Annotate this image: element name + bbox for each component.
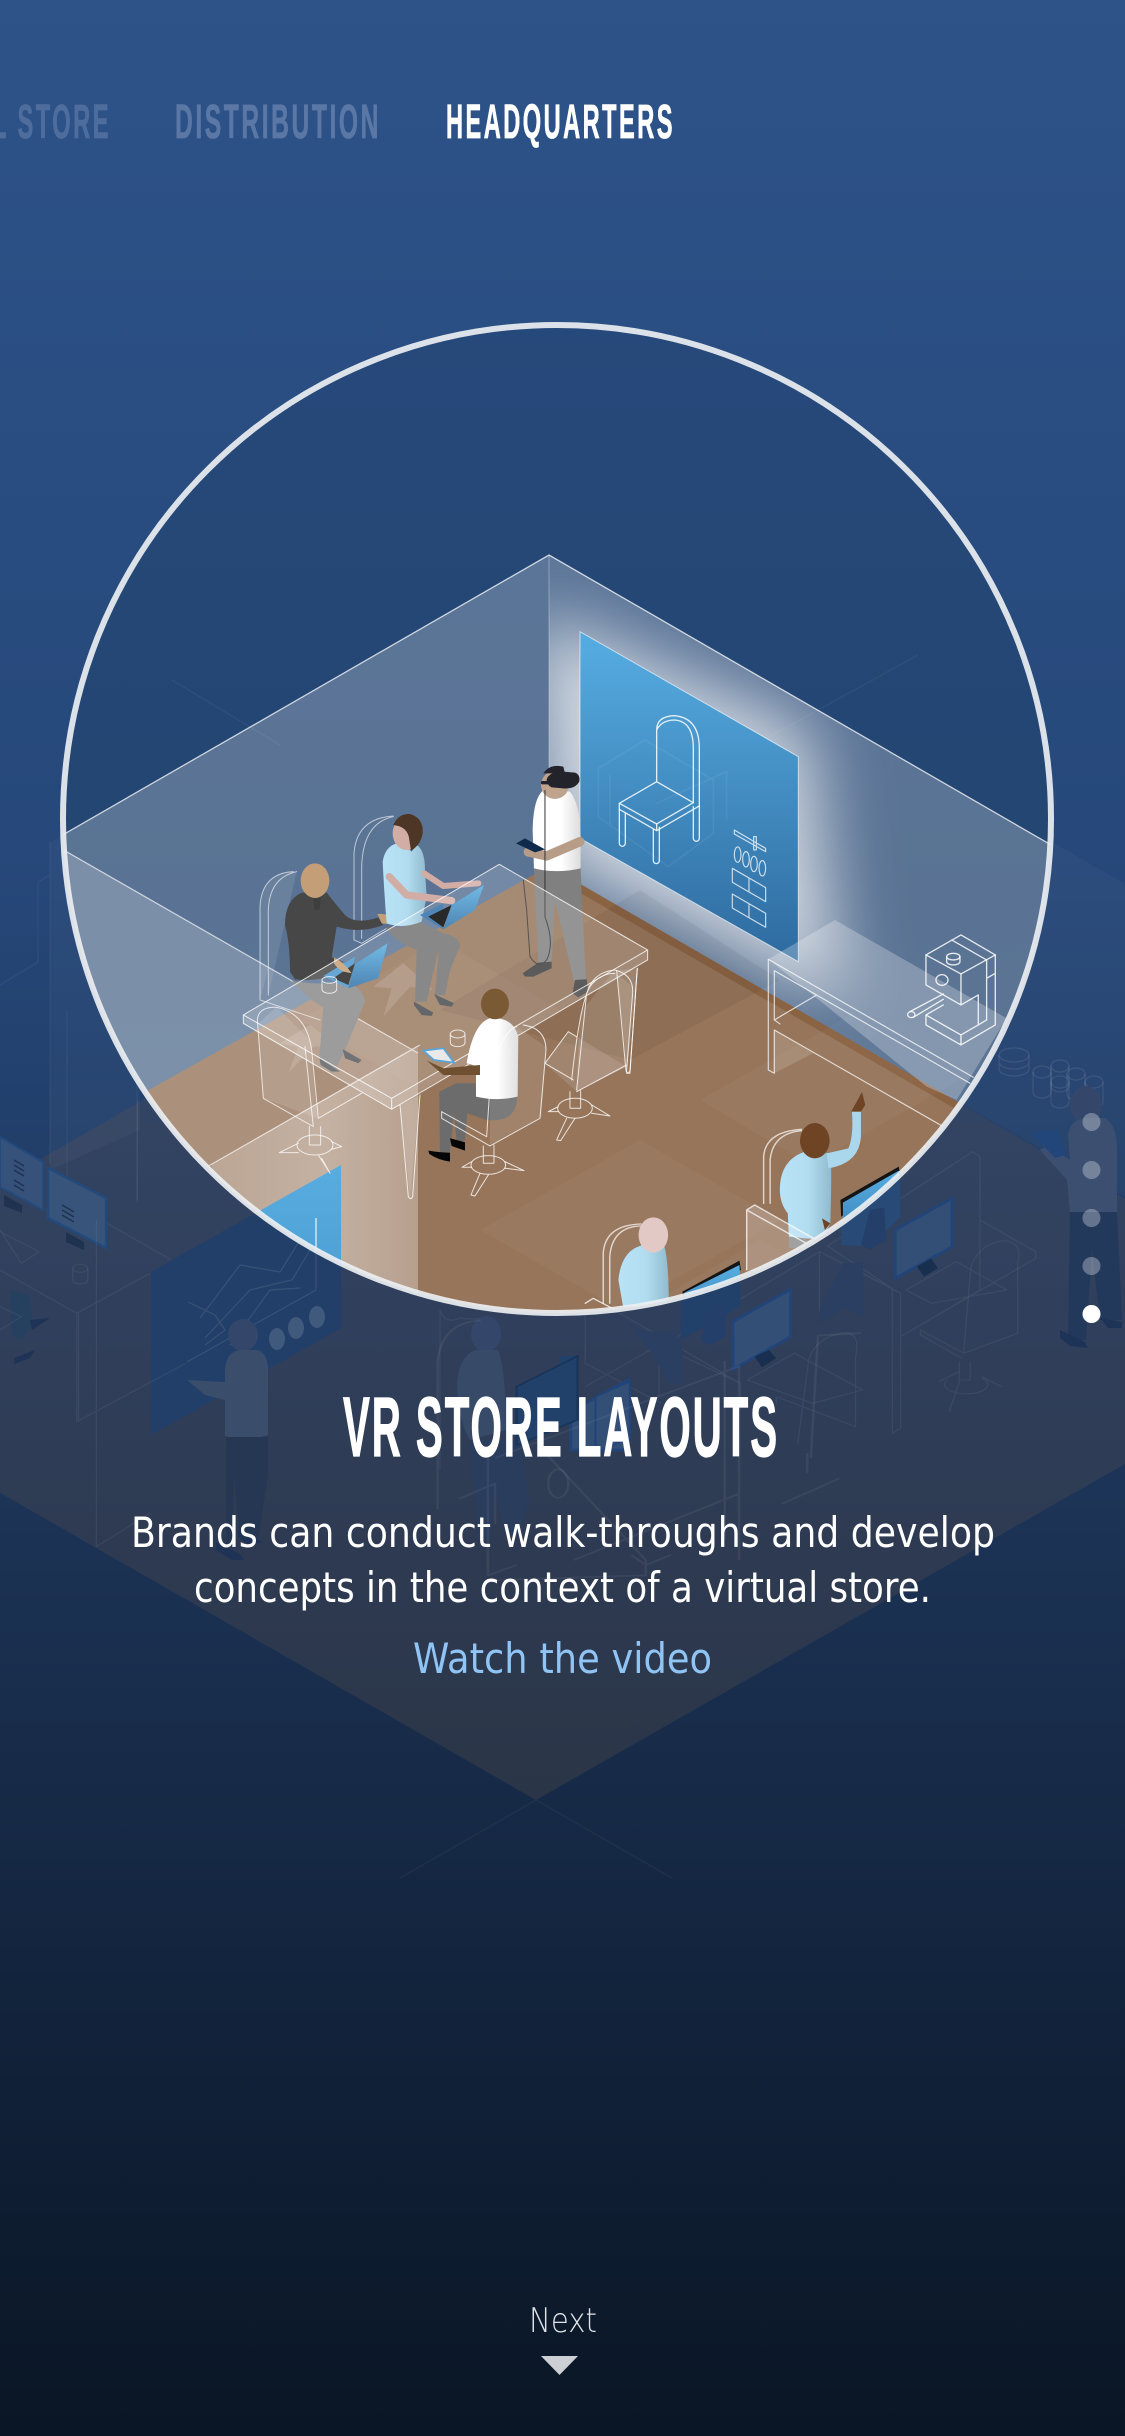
monitor with black bezel left [683, 1261, 741, 1300]
table top [243, 864, 648, 1199]
woman in light blue shirt with laptop [383, 814, 484, 1016]
parquet patches [300, 940, 960, 1390]
faded left wall pieces [50, 800, 140, 1170]
text: HEADQUARTERS [446, 96, 675, 149]
table, chairs and people [243, 766, 648, 1199]
sideboard and coffee machine [768, 920, 1007, 1127]
pagination dots [1082, 1113, 1100, 1323]
sideboard outline [768, 959, 973, 1127]
chair shadows on the floor [280, 963, 433, 1073]
front wall edge lines [60, 848, 420, 1168]
back right wall [549, 556, 1048, 1102]
bright wall band [212, 1045, 418, 1290]
icon: next arrow [541, 2356, 578, 2375]
faded chairs and desks below the title [438, 1320, 861, 1580]
worker raising hand [780, 1092, 865, 1248]
body text [131, 1508, 995, 1612]
faded seated worker with chair [440, 1310, 530, 1540]
blue screen with chair drawing [580, 632, 798, 962]
icon: interface controls [732, 830, 766, 927]
circle interior: VR meeting room [64, 328, 1050, 1313]
seated worker with pale head [618, 1217, 669, 1307]
chair right of table [545, 968, 637, 1141]
watch the video link: Watch the video [413, 1634, 712, 1683]
chair for man with tablet [442, 1025, 546, 1196]
faded workstations right [560, 1152, 1036, 1450]
wooden floor [148, 874, 958, 1313]
chair behind raised-hand worker [764, 1129, 801, 1203]
faded presenter silhouette [187, 1319, 268, 1560]
body text: concepts in the context of a virtual store. [194, 1563, 931, 1612]
monitor with black bezel right [840, 1167, 901, 1217]
chair front left [257, 1007, 362, 1173]
shadow beneath the table [616, 890, 779, 989]
body text: Brands can conduct walk-throughs and develop [131, 1508, 995, 1557]
faint stray lines beyond the room [172, 655, 918, 726]
front right workers, chairs and monitors [584, 1092, 900, 1310]
navigation tabs: DISTRIBUTION [175, 96, 381, 149]
circle outline [63, 325, 1051, 1313]
faded standing worker silhouette right [1030, 1086, 1122, 1348]
floor edge along the right wall [581, 884, 958, 1108]
chair: behind woman [354, 816, 393, 943]
faded left monitors [0, 1137, 106, 1250]
front desk edge [585, 1298, 679, 1343]
faded storage cylinders [999, 1048, 1103, 1108]
faded right wall [955, 839, 1125, 1197]
chair behind second worker [603, 1224, 641, 1303]
icon: coffee machine [908, 935, 995, 1045]
navigation tabs [0, 96, 675, 149]
icon: wireframe chair [619, 716, 699, 864]
translucent front left wall [67, 852, 418, 1290]
faded isometric floor plan behind the circle [0, 800, 1125, 1878]
standing man with VR headset and tablet [516, 766, 588, 997]
floor diamond [0, 866, 1125, 1800]
circle background [66, 328, 1048, 1070]
man with tablet seated at front [423, 989, 518, 1162]
room ceiling edges and corner [40, 555, 1065, 853]
faded data panel [151, 1165, 341, 1435]
back left wall [66, 556, 549, 1090]
front desk divider [747, 1206, 812, 1270]
screen glow on the wall [530, 610, 840, 1000]
man in dark sweater with laptop [285, 863, 397, 1072]
chair: behind dark-clothed man [260, 872, 320, 1020]
faded desks and outlines left [0, 1100, 186, 1547]
faded workers on the left [10, 1290, 50, 1364]
next label: Next [529, 2301, 597, 2341]
bright data screen section [258, 1165, 341, 1263]
